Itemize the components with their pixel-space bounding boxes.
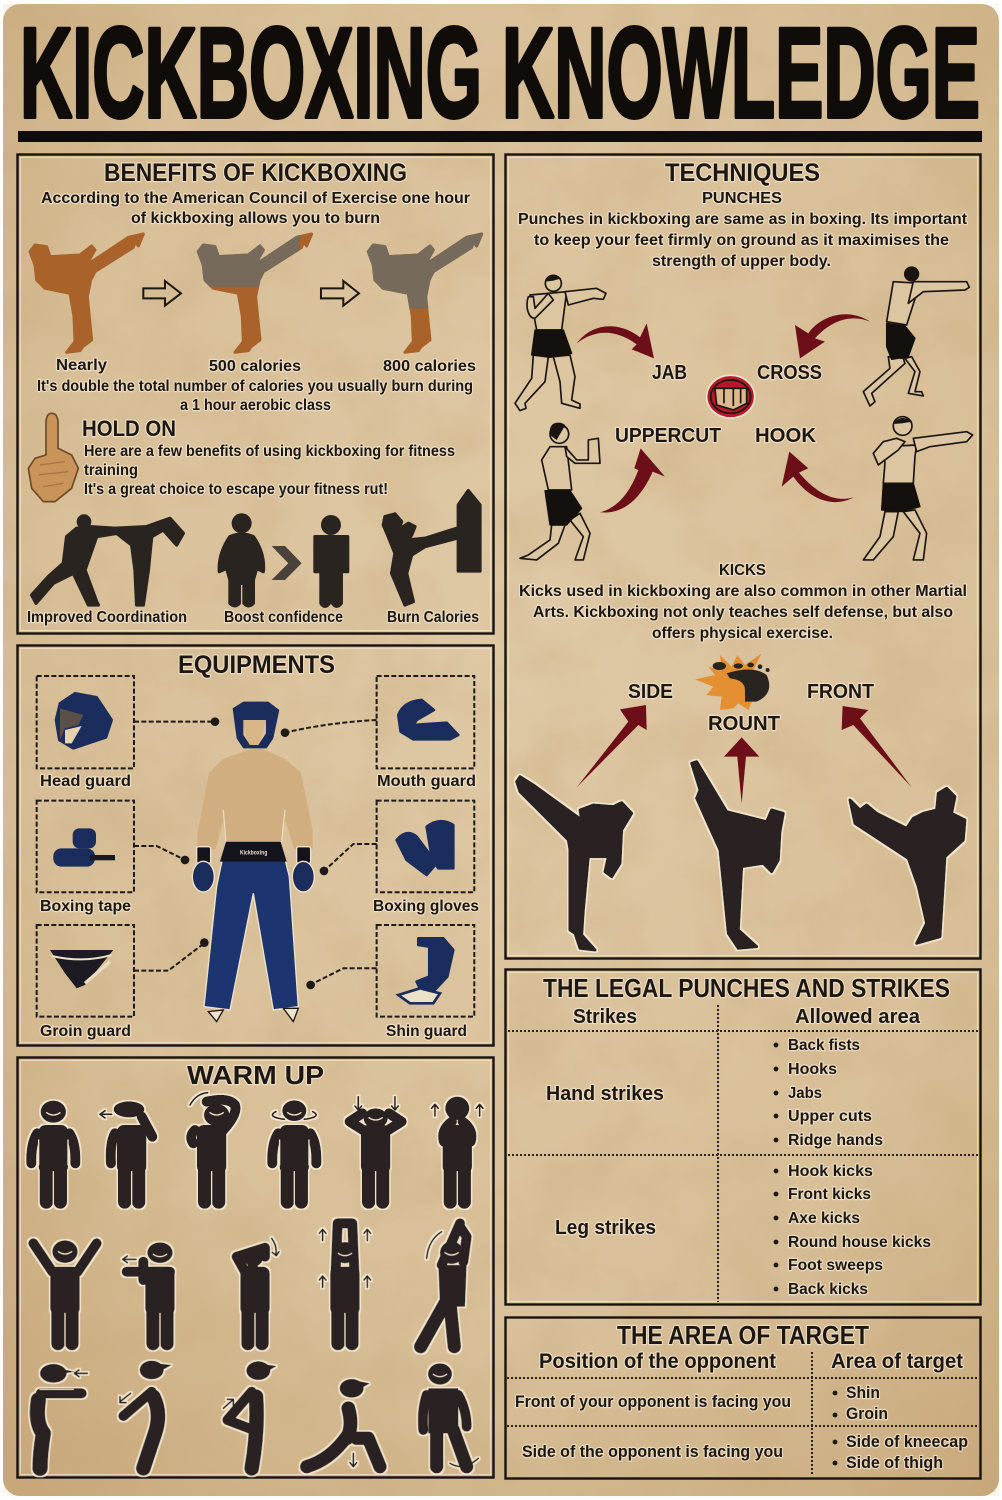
row 3 exercises	[37, 1361, 478, 1468]
row: leg strikes: Axe kicks	[788, 1210, 860, 1227]
icon: groin guard	[50, 950, 113, 988]
text: calorie labels: Nearly	[56, 357, 107, 374]
text: hold on body: Here are a few benefits of using kickboxing for fitness	[84, 443, 455, 460]
heading: benefits: BENEFITS OF KICKBOXING	[104, 159, 407, 187]
text: kicks intro: KICKS	[719, 562, 766, 579]
text: benefits intro: of kickboxing allows you to burn	[131, 210, 380, 227]
icon: woman kicking heavy bag	[383, 491, 480, 605]
figure: jab fighter	[515, 275, 606, 411]
row: hand strikes: Hand strikes	[546, 1083, 664, 1105]
panel: warm up	[18, 1058, 494, 1478]
text: equipment labels: Mouth guard	[377, 773, 476, 790]
row: hand strikes	[546, 1037, 883, 1149]
figure: boxer with equipment: Kickboxing	[240, 850, 267, 857]
text: punch labels: JAB	[652, 362, 687, 384]
icon: boxing gloves	[397, 821, 453, 875]
icon: fat to fit figures with chevron	[219, 513, 348, 606]
text: punches intro	[518, 190, 968, 270]
row 1 exercises	[31, 1093, 483, 1205]
icon: shin guard	[398, 938, 453, 1003]
text: punch labels	[615, 362, 822, 447]
text: hold on body	[84, 443, 455, 498]
kick silhouettes	[517, 762, 965, 950]
text: punches intro: Punches in kickboxing are same as in boxing. Its important	[518, 211, 968, 228]
text: punch labels: CROSS	[757, 362, 822, 384]
icon: foot impact burst	[695, 653, 770, 710]
text: equipment labels: Boxing gloves	[373, 898, 479, 915]
column headers	[573, 1006, 921, 1028]
text: punches intro: strength of upper body.	[652, 253, 831, 270]
icon: fist	[707, 375, 755, 418]
connector lines	[134, 717, 377, 989]
text: equipment labels: Groin guard	[40, 1023, 131, 1040]
figure: hook fighter	[863, 417, 973, 560]
dashed item boxes	[37, 676, 474, 1017]
text: equipment labels: Boxing tape	[40, 898, 131, 915]
column headers: Position of the opponent	[539, 1350, 776, 1373]
figure: front kick	[850, 788, 965, 943]
panel: techniques	[506, 154, 980, 958]
row: hand strikes: Back fists	[788, 1037, 860, 1054]
text: benefit captions: Improved Coordination	[27, 609, 187, 626]
text: benefits intro	[41, 190, 470, 227]
row: leg strikes: Leg strikes	[555, 1217, 656, 1239]
row: leg strikes: Front kicks	[788, 1186, 871, 1203]
row: hand strikes: Ridge hands	[788, 1132, 883, 1149]
row: front facing	[515, 1383, 888, 1423]
figure: cross fighter	[863, 266, 969, 406]
icon: three calorie kickers with arrows	[30, 234, 482, 352]
text: punches intro: PUNCHES	[702, 190, 782, 207]
row: hand strikes: Hooks	[788, 1061, 837, 1078]
icon: two fighters	[32, 514, 183, 605]
figure: boxer with equipment	[192, 702, 314, 1022]
column headers: Strikes	[573, 1006, 637, 1028]
figure: side kick	[517, 777, 632, 950]
text: kicks intro: Arts. Kickboxing not only teaches self defense, but also	[533, 604, 953, 621]
text: equipment labels: Head guard	[40, 773, 131, 790]
row: leg strikes	[555, 1163, 931, 1298]
row: leg strikes: Back kicks	[788, 1281, 868, 1298]
text: benefit captions	[27, 609, 479, 626]
heading: hold on: HOLD ON	[82, 416, 176, 441]
arrows: curved red punch arrows	[577, 314, 870, 513]
row: hand strikes: Jabs	[788, 1085, 822, 1102]
warm up pictograms	[31, 1093, 483, 1468]
text: hold on body: training	[84, 462, 138, 479]
text: kicks intro: Kicks used in kickboxing are also common in other Martial	[519, 583, 967, 600]
panel: benefits of kickboxing	[18, 154, 494, 634]
text: kick labels: SIDE	[628, 681, 673, 703]
text: punches intro: to keep your feet firmly on ground as it maximises the	[534, 232, 949, 249]
row: side facing: Side of kneecap	[846, 1432, 968, 1451]
heading: area of target: THE AREA OF TARGET	[617, 1320, 869, 1350]
text: calorie labels: 500 calories	[209, 358, 301, 375]
text: punch labels: HOOK	[755, 425, 817, 447]
text: calorie labels: It's double the total number of calories you usually burn during	[37, 378, 473, 395]
text: calorie labels	[37, 357, 476, 414]
figure: round kick	[692, 762, 783, 948]
row: side facing	[522, 1432, 968, 1472]
column headers: Allowed area	[795, 1006, 921, 1028]
text: kicks intro	[519, 562, 967, 642]
panel: legal punches and strikes table	[506, 970, 980, 1304]
row: hand strikes: Upper cuts	[788, 1108, 872, 1125]
column headers	[539, 1350, 963, 1373]
text: punch labels: UPPERCUT	[615, 425, 721, 447]
text: benefits intro: According to the American Council of Exercise one hour	[41, 190, 470, 207]
text: benefit captions: Burn Calories	[387, 609, 479, 626]
row: leg strikes: Foot sweeps	[788, 1257, 883, 1274]
row: front facing: Front of your opponent is facing you	[515, 1392, 791, 1411]
row: front facing: Shin	[846, 1383, 880, 1402]
figure: uppercut fighter	[520, 423, 600, 560]
icon: head guard	[56, 693, 112, 748]
heading: warm up: WARM UP	[187, 1060, 324, 1090]
text: equipment labels	[40, 773, 479, 1040]
heading: equipments: EQUIPMENTS	[178, 651, 335, 679]
text: kick labels	[628, 681, 874, 735]
row: leg strikes: Round house kicks	[788, 1234, 931, 1251]
text: hold on body: It's a great choice to escape your fitness rut!	[84, 481, 388, 498]
icon: raised finger hand	[28, 413, 78, 502]
icon: boxing tape	[53, 828, 115, 867]
text: benefit captions: Boost confidence	[224, 609, 343, 626]
text: kick labels: FRONT	[807, 681, 874, 703]
row: side facing: Side of the opponent is facing you	[522, 1442, 783, 1461]
icon: mouth guard	[398, 700, 458, 739]
heading: techniques: TECHNIQUES	[665, 159, 820, 187]
column headers: Area of target	[831, 1350, 963, 1373]
text: kicks intro: offers physical exercise.	[652, 625, 833, 642]
arrows: straight red kick arrows	[577, 705, 912, 803]
text: kick labels: ROUNT	[708, 713, 780, 735]
text: calorie labels: 800 calories	[383, 358, 476, 375]
heading: legal punches: THE LEGAL PUNCHES AND STRIKES	[543, 973, 950, 1003]
row: leg strikes: Hook kicks	[788, 1163, 873, 1180]
row 2 exercises	[33, 1223, 467, 1347]
text: equipment labels: Shin guard	[386, 1023, 467, 1040]
text: calorie labels: a 1 hour aerobic class	[180, 397, 331, 414]
row: side facing: Side of thigh	[846, 1453, 943, 1472]
row: front facing: Groin	[846, 1404, 888, 1423]
panel: equipments	[18, 646, 494, 1046]
panel: area of target table	[506, 1318, 980, 1478]
